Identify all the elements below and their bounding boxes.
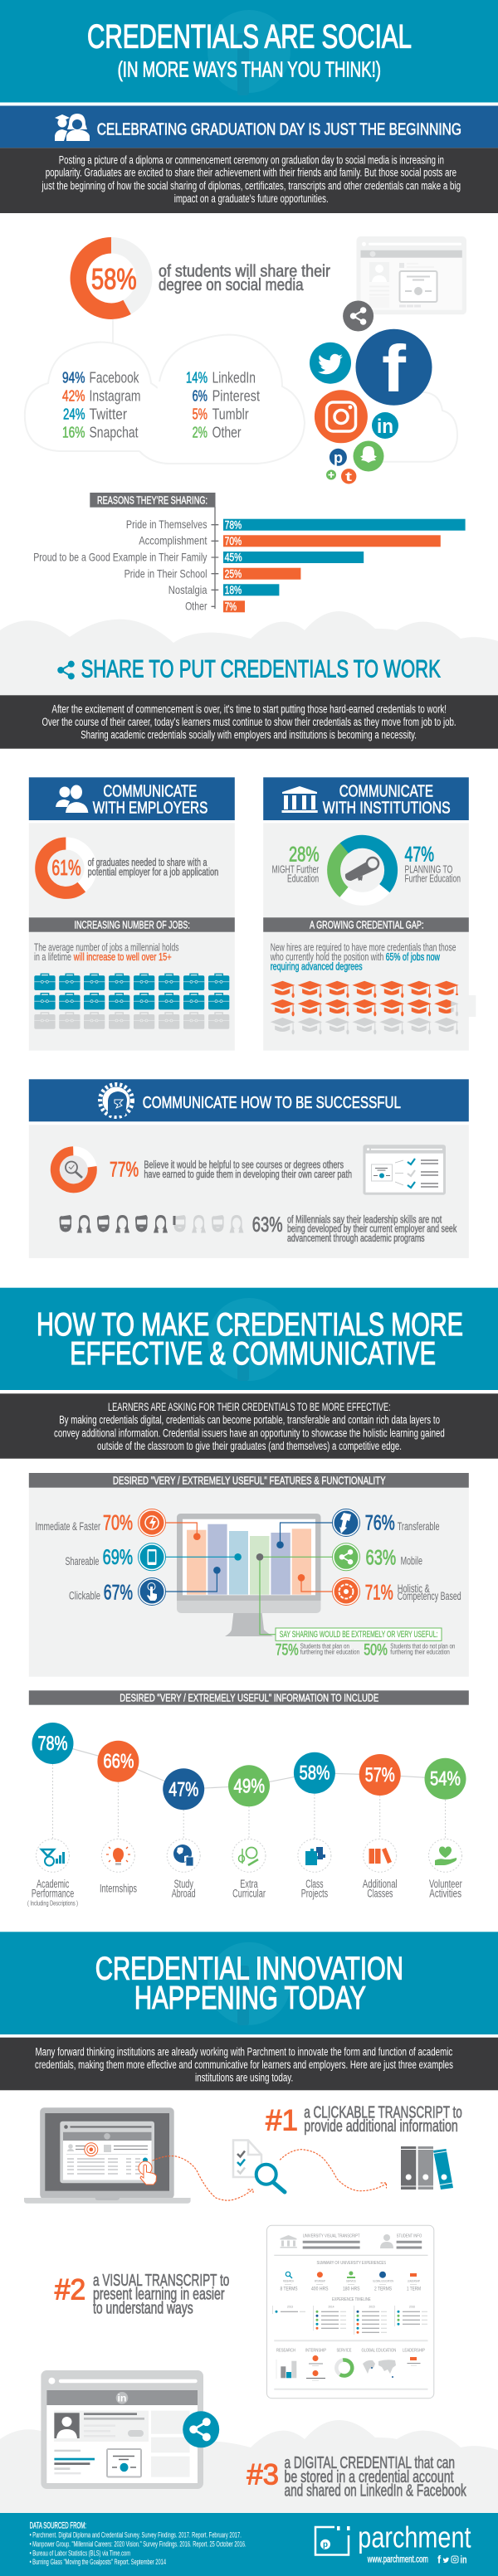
icon row: people — [60, 1215, 244, 1232]
panel header — [29, 1473, 469, 1488]
title: CREDENTIAL INNOVATION — [95, 1951, 403, 1987]
icon grid: briefcases — [34, 974, 229, 1029]
icon: social logos cluster: in — [377, 416, 393, 438]
summary of experiences — [281, 2261, 421, 2292]
stat: 28% might further education: Education — [287, 872, 319, 885]
heading: #2 visual transcript: present learning in easier — [93, 2286, 225, 2304]
stat: 47% planning to further education: 47% — [405, 843, 434, 867]
bubble: 66%: 66% — [103, 1751, 134, 1773]
bubble: 49% — [228, 1765, 270, 1806]
icon: institution — [281, 2235, 297, 2248]
bar chart: reasons they're sharing: Accomplishment — [139, 534, 208, 547]
bar chart: reasons they're sharing: Pride in Themselves — [126, 518, 208, 531]
panel: social network shares cloud: 42% — [62, 387, 85, 405]
bubble: 47% — [163, 1768, 204, 1810]
panel: desired information to include — [27, 1690, 469, 1907]
panel header — [29, 1690, 469, 1705]
bubble: 57%: 57% — [365, 1764, 395, 1786]
panel: social network shares cloud — [25, 335, 305, 464]
panel header — [29, 1079, 469, 1121]
text block: share intro — [0, 695, 498, 749]
summary of experiences: 180 HRS — [343, 2287, 360, 2292]
heading: #2 visual transcript: a VISUAL TRANSCRIPT to — [93, 2272, 229, 2290]
bar chart: reasons they're sharing: 78% — [225, 518, 242, 531]
panel: digital credential cloud background — [0, 2420, 498, 2513]
bar chart: reasons they're sharing: 45% — [225, 551, 242, 564]
stat: 77%: Believe it would be helpful to see courses or degrees others — [144, 1159, 344, 1171]
text block: credential gap: 65% of jobs now — [386, 951, 441, 963]
summary of experiences: RESEARCH — [283, 2280, 294, 2283]
panel: social network shares cloud: Instagram — [90, 387, 141, 405]
icon: institution — [282, 786, 318, 813]
labels: Classes — [367, 1887, 393, 1899]
bubble: 78%: 78% — [38, 1733, 68, 1755]
labels: Internships — [100, 1883, 137, 1895]
bubble: 47%: 47% — [168, 1778, 198, 1801]
feature: shareable — [65, 1543, 166, 1571]
labels: Curricular — [232, 1887, 266, 1899]
chart header — [90, 493, 216, 508]
experience timeline: 2014 — [329, 2305, 334, 2308]
stat: 28% might further education — [272, 843, 320, 885]
panel: social network shares cloud: Snapchat — [90, 424, 138, 441]
panel header: DESIRED "VERY / EXTREMELY USEFUL" INFORMATION TO INCLUDE — [120, 1692, 378, 1704]
panel: celebrating graduation day heading — [0, 106, 498, 148]
feature: immediate and faster — [35, 1509, 166, 1536]
experience timeline: 2016 — [409, 2305, 415, 2308]
panel header: COMMUNICATE HOW TO BE SUCCESSFUL — [143, 1094, 401, 1112]
icon: graduates — [55, 114, 90, 141]
icon: student — [380, 2234, 393, 2248]
title — [37, 1307, 463, 1372]
bar chart: reasons they're sharing: 70% — [225, 534, 242, 547]
summary of experiences: 400 HRS — [311, 2287, 329, 2292]
data sources: • Bureau of Labor Statistics (BLS) via Time.com — [30, 2549, 130, 2557]
feature: clickable: Clickable — [69, 1590, 100, 1602]
panel header: COMMUNICATE — [103, 783, 197, 801]
icon: books — [364, 1839, 397, 1872]
bar chart: reasons they're sharing: 25% — [225, 566, 242, 580]
data sources: DATA SOURCED FROM: — [30, 2521, 86, 2531]
bubble: 58% — [294, 1752, 335, 1794]
heading: #1 clickable transcript — [266, 2103, 462, 2136]
icon: pointer hand — [139, 2161, 156, 2185]
heading: #3 digital credential — [247, 2454, 466, 2501]
panel: communicate with employers — [29, 777, 235, 1051]
summary of experiences: INTERNSHIP — [315, 2280, 325, 2283]
callout: sharing would be useful: Students that do not plan on — [390, 1642, 456, 1650]
summary of experiences: SUMMARY OF UNIVERSITY EXPERIENCES — [317, 2261, 386, 2266]
text block: jobs: The average number of jobs a millennial holds — [34, 942, 179, 954]
icon: magnifier check — [66, 1161, 82, 1178]
data sources — [30, 2521, 247, 2566]
callout: sharing would be useful: 50% — [364, 1642, 388, 1660]
stat: 47% planning to further education: PLANNING TO — [405, 863, 452, 875]
panel header: WITH INSTITUTIONS — [323, 799, 451, 817]
icon: checklist browser — [363, 1145, 446, 1195]
stat: 28% might further education: MIGHT Further — [272, 863, 320, 875]
feature: mobile — [332, 1543, 422, 1571]
icon: gear head — [100, 1085, 133, 1116]
panel: social network shares cloud: Other — [212, 424, 242, 441]
stat: 47% planning to further education — [405, 843, 461, 885]
labels: Additional — [363, 1878, 398, 1890]
panel header: WITH EMPLOYERS — [93, 799, 208, 817]
stat: 77%: 77% — [110, 1159, 139, 1182]
panel: social network shares cloud: 14% — [186, 369, 208, 386]
feature: shareable: 69% — [103, 1546, 133, 1569]
panel: credential innovation header — [0, 1932, 498, 2034]
connectors — [165, 1523, 333, 1635]
labels: Performance — [32, 1887, 74, 1899]
title — [95, 1951, 403, 2016]
bubble: 78% — [32, 1723, 73, 1764]
icon: share — [57, 661, 75, 679]
feature: holistic and competency based: 71% — [365, 1581, 393, 1604]
labels: Class — [305, 1878, 324, 1890]
feature: mobile: 63% — [365, 1547, 396, 1570]
line chart connector — [53, 1743, 445, 1789]
panel: social network shares cloud: 94% — [62, 369, 85, 386]
sub-heading: growing credential gap — [263, 917, 469, 932]
feature: clickable: 67% — [104, 1581, 133, 1604]
stat: 63%: advancement through academic programs — [287, 1232, 425, 1244]
dashed drop lines — [53, 1764, 445, 1839]
data sources: • Burning Glass "Moving the Goalposts" Report. September 2014 — [30, 2558, 166, 2566]
bar chart: reasons they're sharing: Other — [185, 600, 208, 613]
icon: puzzle — [298, 1839, 331, 1872]
summary of experiences: LEADERSHIP — [408, 2280, 420, 2283]
stat: 63% — [252, 1213, 457, 1244]
transcript title — [303, 2234, 360, 2248]
labels: Study — [174, 1878, 193, 1890]
summary of experiences: 2 TERMS — [374, 2287, 392, 2292]
callout: sharing would be useful: furthering their education — [390, 1648, 450, 1656]
panel: social network shares cloud: Tumblr — [212, 406, 249, 423]
sub-heading: growing credential gap: A GROWING CREDENTIAL GAP: — [310, 919, 423, 931]
data sources: • Parchment. Digital Diploma and Credential Survey. Survey Findings. 2017. Report. February 2017. — [30, 2530, 242, 2539]
heading: #1 clickable transcript: #1 — [266, 2104, 298, 2136]
sub-heading: increasing number of jobs — [29, 917, 235, 932]
text block: 61% statement — [88, 857, 218, 877]
feature: holistic and competency based: Holistic & — [398, 1582, 430, 1595]
social icons — [437, 2554, 466, 2566]
labels — [27, 1878, 462, 1907]
charts by category: INTERNSHIP — [305, 2348, 326, 2353]
bubble: 54%: 54% — [430, 1768, 461, 1791]
icon: employers — [56, 785, 88, 813]
bubble: 58%: 58% — [299, 1762, 330, 1785]
stat: 77% — [110, 1159, 352, 1182]
stat: 63%: 63% — [252, 1213, 283, 1237]
labels: Volunteer — [429, 1878, 462, 1890]
callout: sharing would be useful: furthering their education — [300, 1648, 359, 1656]
charts by category — [276, 2348, 425, 2380]
labels: Projects — [301, 1887, 328, 1899]
text block: credential gap — [270, 942, 456, 972]
donut chart: 77% — [53, 1149, 95, 1190]
text block: innovation intro: institutions are using today. — [195, 2072, 293, 2084]
data sources: • Manpower Group. "Millennial Careers: 2020 Vision." Survey Findings. 2016. Report. 25 October 2016. — [30, 2540, 247, 2548]
sub-heading: increasing number of jobs: INCREASING NUMBER OF JOBS: — [75, 919, 190, 931]
heading: #2 visual transcript: to understand ways — [93, 2299, 193, 2317]
title: HAPPENING TODAY — [134, 1981, 366, 2016]
heading: #2 visual transcript — [55, 2272, 229, 2317]
bubble: 66% — [97, 1741, 139, 1782]
icon grid: graduation caps — [271, 981, 476, 1034]
panel header: COMMUNICATE — [339, 783, 433, 801]
social icons: in — [460, 2554, 466, 2566]
text block: learners are asking — [0, 1393, 498, 1459]
panel: page header — [0, 0, 498, 103]
labels: Academic — [37, 1878, 70, 1890]
labels: Extra — [240, 1878, 258, 1890]
bar chart: reasons they're sharing: 18% — [225, 583, 242, 596]
panel: communicate with institutions — [263, 777, 476, 1051]
panel: share to put credentials to work — [0, 611, 498, 697]
bubble: 57% — [359, 1754, 401, 1796]
panel: social network shares cloud: 24% — [63, 406, 85, 423]
donut chart: further education — [322, 830, 403, 911]
labels: Activities — [429, 1887, 461, 1899]
summary of experiences: 1 TERM — [407, 2287, 421, 2292]
summary of experiences: GLOBAL EDUCATION — [373, 2280, 393, 2283]
icon: social logos cluster: t — [345, 470, 353, 484]
icon: linkedin profile browser: in — [118, 2392, 126, 2403]
social icons: f — [437, 2554, 442, 2566]
icon: heart in hand — [428, 1839, 461, 1872]
text block: jobs: in a lifetime — [34, 951, 71, 963]
text block: jobs: will increase to well over 15+ — [73, 951, 172, 963]
arrow: document to books — [281, 2150, 387, 2191]
feature: immediate and faster: Immediate & Faster — [35, 1520, 100, 1533]
stat: 63%: of Millennials say their leadership skills are not — [287, 1213, 442, 1225]
connector dots — [193, 1533, 305, 1582]
text block: 58% statement: degree on social media — [159, 276, 304, 294]
panel header — [263, 777, 469, 820]
text block: 58% statement — [159, 262, 330, 294]
panel: social network shares cloud: 5% — [193, 406, 208, 423]
panel: desired features and functionality — [29, 1473, 469, 1677]
panel: social network shares cloud: Pinterest — [212, 387, 260, 405]
panel: social network shares cloud: 2% — [193, 424, 208, 441]
panel: social network shares cloud: 16% — [62, 424, 85, 441]
bubble: 49%: 49% — [234, 1775, 265, 1797]
text block: intro — [0, 148, 498, 213]
panel: social network shares cloud: Twitter — [90, 406, 127, 423]
callout: sharing would be useful: Students that plan on — [300, 1642, 349, 1650]
donut chart: 58% — [66, 234, 156, 343]
panel: social network shares cloud: LinkedIn — [212, 369, 256, 386]
charts by category: SERVICE — [337, 2348, 352, 2353]
feature: transferable: Transferable — [398, 1520, 440, 1533]
bar chart: reasons they're sharing — [33, 493, 466, 613]
parchment logo: parchment — [358, 2520, 471, 2554]
charts by category: LEADERSHIP — [403, 2348, 425, 2353]
text block: innovation intro — [0, 2038, 498, 2090]
callout: sharing would be useful: 75% — [276, 1642, 299, 1660]
labels: Abroad — [172, 1887, 196, 1899]
experience timeline: EXPERIENCE TIMELINE — [332, 2297, 371, 2302]
arrow: laptop to document — [153, 2156, 253, 2200]
feature: immediate and faster: 70% — [103, 1511, 133, 1534]
charts by category: GLOBAL EDUCATION — [362, 2348, 396, 2353]
icon: social logos cluster: p — [334, 450, 343, 466]
text block: 58% statement: of students will share their — [159, 262, 330, 280]
panel: communicate how to be successful — [29, 1079, 469, 1258]
feature: transferable — [332, 1509, 440, 1536]
donut chart: 58%: 58% — [91, 263, 137, 295]
panel: social network shares cloud: Facebook — [90, 369, 139, 386]
heading: #3 digital credential: #3 — [247, 2459, 279, 2491]
charts by category: RESEARCH — [276, 2348, 295, 2353]
panel: footer — [0, 2513, 498, 2576]
stat: 28% might further education: 28% — [289, 843, 320, 867]
text block: intro: impact on a graduate's future opportunities. — [174, 192, 329, 205]
summary of experiences: 8 TERMS — [281, 2287, 298, 2292]
labels: ( Including Descriptions ) — [27, 1898, 78, 1907]
icon: monitor chart — [177, 1514, 320, 1636]
icon: document and magnifier — [233, 2140, 285, 2192]
stat: 47% planning to further education: Further Education — [405, 872, 461, 885]
panel header — [29, 777, 235, 820]
text block: credential gap: who currently hold the position with — [270, 951, 383, 963]
parchment logo — [315, 2520, 471, 2554]
experience timeline: 2013 — [287, 2305, 293, 2308]
callout: sharing would be useful — [276, 1628, 456, 1660]
parchment logo: p — [323, 2540, 328, 2549]
icon: social logos cluster — [310, 300, 457, 484]
summary of experiences: SERVICE — [346, 2280, 357, 2283]
feature: clickable — [69, 1577, 166, 1606]
experience timeline — [272, 2297, 427, 2335]
text block: credential gap: requiring advanced degrees — [271, 960, 363, 972]
bar chart: reasons they're sharing: 7% — [225, 600, 237, 613]
icon: social logos cluster: f — [382, 332, 406, 406]
icon: laptop with clickable transcript — [24, 2107, 191, 2204]
text block: 61% statement: of graduates needed to share with a — [88, 857, 208, 868]
stat: 77%: have earned to guide them in developing their own career path — [144, 1169, 352, 1180]
feature: mobile: Mobile — [401, 1555, 422, 1567]
feature: holistic and competency based: Competency Based — [398, 1590, 461, 1602]
panel: visual transcript card — [267, 2225, 434, 2399]
feature: transferable: 76% — [365, 1511, 395, 1534]
donut chart: 61% — [32, 834, 100, 903]
icon: music, ball and brush — [232, 1839, 266, 1872]
bar chart: reasons they're sharing: Pride in Their School — [124, 566, 208, 580]
subtitle: (IN MORE WAYS THAN YOU THINK!) — [118, 57, 381, 82]
icon: globe and book — [167, 1839, 200, 1872]
website: www.parchment.com — [367, 2554, 428, 2564]
feature: shareable: Shareable — [65, 1555, 99, 1567]
text block: jobs — [34, 942, 179, 963]
icon: medal and chart — [37, 1839, 70, 1872]
icon: books — [401, 2146, 453, 2190]
donut chart: 61%: 61% — [51, 855, 81, 880]
bar chart: reasons they're sharing: Proud to be a Good Example in Their Family — [33, 551, 208, 564]
feature: holistic and competency based — [332, 1577, 461, 1606]
icon: linkedin profile browser — [41, 2370, 219, 2489]
experience timeline: 2015 — [369, 2305, 375, 2308]
bar chart: reasons they're sharing: Nostalgia — [168, 583, 208, 596]
bubble: 54% — [425, 1758, 466, 1800]
panel header: DESIRED "VERY / EXTREMELY USEFUL" FEATURES & FUNCTIONALITY — [113, 1475, 386, 1487]
icon: diploma — [345, 858, 378, 881]
text block: 61% statement: potential employer for a job application — [88, 866, 218, 877]
panel: how to make credentials effective header — [0, 1288, 498, 1390]
heading: #2 visual transcript: #2 — [55, 2274, 85, 2306]
icon: light bulb — [101, 1839, 134, 1872]
chart header: REASONS THEY'RE SHARING: — [97, 493, 208, 506]
transcript title: UNIVERSITY VISUAL TRANSCRIPT — [303, 2234, 360, 2239]
student info — [397, 2234, 422, 2248]
icon: profile browser mockup — [357, 236, 466, 314]
panel: social network shares cloud: 6% — [193, 387, 208, 405]
student info: STUDENT INFO — [397, 2234, 422, 2239]
